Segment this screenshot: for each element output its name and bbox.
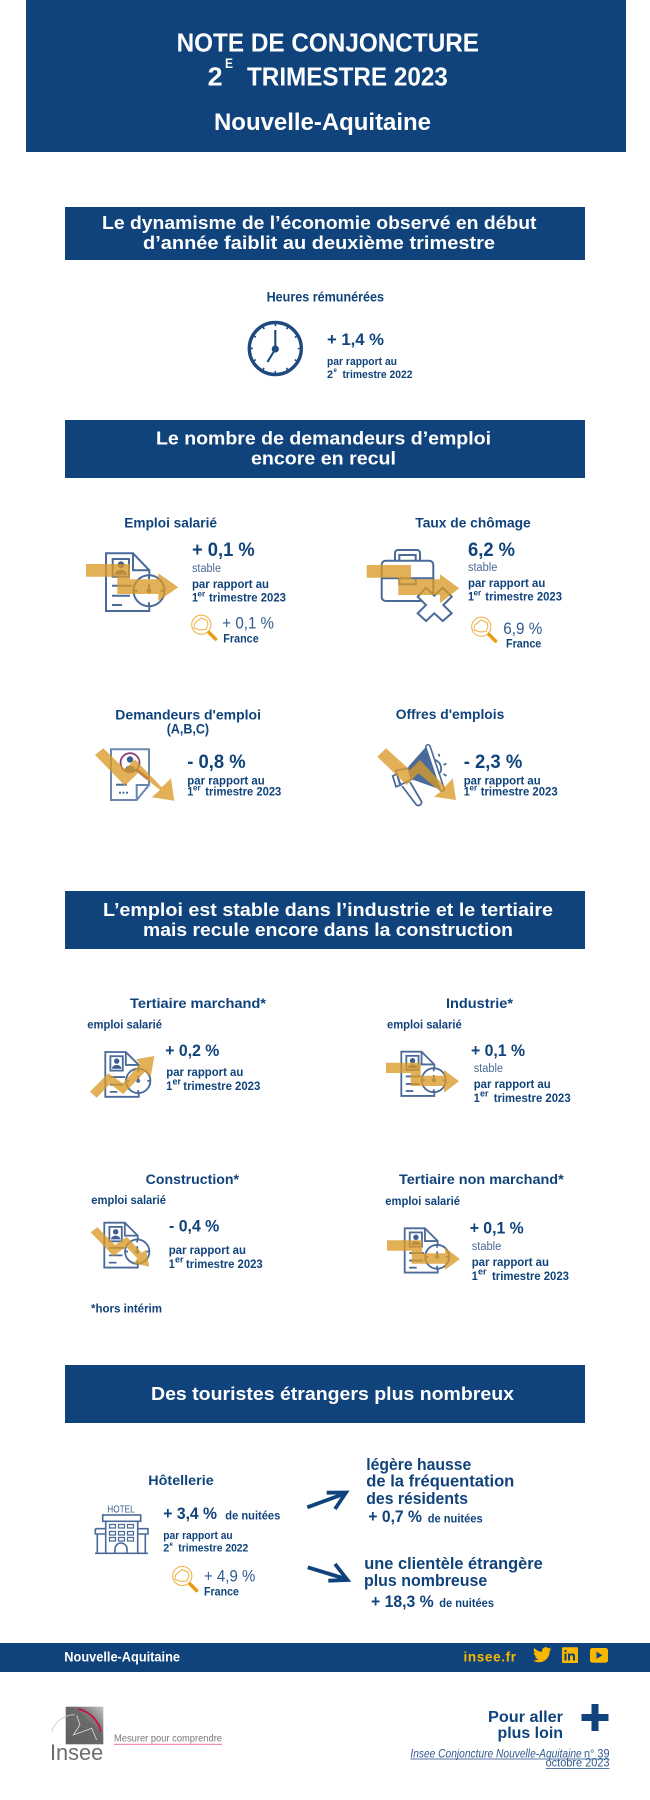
comparison text: 2 bbox=[163, 1543, 169, 1555]
heading: Construction* bbox=[146, 1171, 240, 1187]
callout: clientèle étrangère: de nuitées bbox=[439, 1598, 494, 1610]
heading: plus loin bbox=[498, 1725, 563, 1742]
heading: Tertiaire marchand* bbox=[130, 995, 267, 1011]
comparison text: er bbox=[480, 1088, 489, 1098]
section heading: touristes: Des touristes étrangers plus nombreux bbox=[151, 1383, 515, 1404]
comparison text bbox=[472, 1257, 569, 1283]
icon: document with magnifier bbox=[111, 749, 149, 800]
heading: Offres d'emplois bbox=[396, 706, 504, 722]
value: - 2,3 % bbox=[464, 751, 522, 773]
callout: résidents bbox=[366, 1456, 514, 1526]
panel: industrie bbox=[386, 995, 571, 1105]
value: - 0,8 % bbox=[187, 751, 246, 773]
publication link: n° 39 bbox=[584, 1746, 610, 1760]
icon: document and clock bbox=[105, 1052, 150, 1097]
icon: document and clock bbox=[401, 1052, 446, 1096]
value: + 0,2 % bbox=[165, 1041, 219, 1060]
icon: plus bbox=[582, 1704, 608, 1731]
comparison text: trimestre 2023 bbox=[485, 592, 562, 604]
comparison text: par rapport au bbox=[187, 775, 265, 787]
icon: magnifier France bbox=[192, 615, 216, 639]
footer region: Nouvelle-Aquitaine bbox=[64, 1650, 180, 1665]
icon: document and clock bbox=[405, 1228, 449, 1273]
heading: Pour aller bbox=[488, 1709, 563, 1726]
section heading: emploi par secteur: L’emploi est stable dans l’industrie et le tertiaire bbox=[103, 899, 553, 920]
arrow: stable bbox=[367, 565, 459, 603]
arrow: stable bbox=[386, 1063, 459, 1093]
comparison text: trimestre 2023 bbox=[481, 787, 558, 799]
panel: demandeurs d'emploi bbox=[95, 706, 281, 801]
section heading: dynamisme: d’année faiblit au deuxième trimestre bbox=[143, 232, 495, 253]
status: stable bbox=[474, 1063, 503, 1075]
value: + 1,4 % bbox=[327, 330, 384, 349]
publication link bbox=[410, 1746, 610, 1770]
footer bar bbox=[0, 1643, 650, 1672]
comparison text: par rapport au bbox=[163, 1530, 233, 1542]
France label: France bbox=[204, 1587, 239, 1599]
icon: linkedin bbox=[562, 1647, 578, 1663]
comparison text bbox=[474, 1079, 571, 1105]
title line 2 bbox=[208, 55, 448, 92]
panel: heures rémunérées bbox=[249, 289, 412, 381]
icon: megaphone bbox=[393, 746, 446, 806]
callout: résidents: de nuitées bbox=[428, 1513, 483, 1525]
title line 2: TRIMESTRE 2023 bbox=[247, 62, 448, 92]
icon: youtube bbox=[590, 1648, 608, 1663]
heading: Taux de chômage bbox=[415, 514, 531, 530]
comparison text: e bbox=[334, 368, 338, 374]
sublabel: emploi salarié bbox=[87, 1020, 162, 1032]
comparison text: er bbox=[193, 784, 201, 792]
publication link: octobre 2023 bbox=[546, 1756, 610, 1770]
tagline: Mesurer pour comprendre bbox=[114, 1732, 222, 1744]
icon: clock bbox=[249, 322, 301, 374]
value: + 3,4 % bbox=[163, 1504, 217, 1523]
region subtitle: Nouvelle-Aquitaine bbox=[214, 109, 431, 136]
comparison text: trimestre 2023 bbox=[494, 1093, 571, 1105]
callout: clientèle étrangère: une clientèle étrangère bbox=[364, 1555, 543, 1573]
icon: hotel: HOTEL bbox=[107, 1505, 135, 1516]
heading: Demandeurs d'emploi bbox=[115, 706, 261, 722]
callout: clientèle étrangère: + 18,3 % bbox=[371, 1592, 434, 1611]
panel: offres d'emplois bbox=[377, 706, 558, 806]
title line 2: 2 bbox=[208, 62, 223, 92]
comparison text: 2 bbox=[327, 369, 333, 381]
comparison text: 1 bbox=[472, 1271, 478, 1283]
comparison text: 1 bbox=[192, 593, 199, 605]
arrow: up bbox=[90, 1056, 154, 1098]
comparison text: er bbox=[478, 1266, 487, 1276]
panel: hôtellerie bbox=[95, 1472, 280, 1599]
header banner bbox=[26, 0, 626, 152]
comparison text bbox=[464, 775, 558, 799]
comparison text: 1 bbox=[468, 592, 475, 604]
panel: tertiaire marchand bbox=[87, 995, 267, 1098]
icon: hotel bbox=[95, 1505, 148, 1553]
icon: magnifier France bbox=[173, 1566, 196, 1590]
icon: twitter bbox=[533, 1647, 551, 1662]
comparison text: par rapport au bbox=[327, 356, 397, 368]
comparison text bbox=[166, 1067, 260, 1093]
France value: + 4,9 % bbox=[204, 1567, 255, 1586]
section heading: demandeurs d'emploi: Le nombre de demandeurs d’emploi bbox=[156, 428, 491, 448]
callout: clientèle étrangère: plus nombreuse bbox=[364, 1572, 487, 1590]
France value: + 0,1 % bbox=[222, 614, 274, 633]
Insee logo bbox=[50, 1707, 222, 1765]
arrow: stable bbox=[86, 564, 178, 601]
comparison text: 1 bbox=[166, 1081, 173, 1093]
callout: résidents: légère hausse bbox=[366, 1456, 471, 1474]
arrow: down bbox=[377, 748, 456, 800]
comparison text: trimestre 2022 bbox=[342, 369, 412, 381]
heading bbox=[488, 1709, 563, 1742]
comparison text: trimestre 2023 bbox=[492, 1271, 569, 1283]
heading: Tertiaire non marchand* bbox=[399, 1171, 564, 1187]
section heading: demandeurs d'emploi: encore en recul bbox=[251, 448, 396, 468]
comparison text bbox=[327, 356, 412, 381]
icon: briefcase with cross bbox=[382, 550, 452, 621]
value: - 0,4 % bbox=[169, 1216, 219, 1235]
section heading: dynamisme: Le dynamisme de l’économie observé en début bbox=[102, 212, 536, 233]
value: + 0,1 % bbox=[471, 1041, 525, 1060]
value bbox=[163, 1504, 280, 1523]
section heading: touristes bbox=[65, 1365, 585, 1423]
value: + 0,1 % bbox=[470, 1218, 524, 1237]
heading: Heures rémunérées bbox=[267, 289, 384, 305]
status: stable bbox=[468, 562, 497, 574]
section heading: emploi par secteur: mais recule encore dans la construction bbox=[143, 919, 513, 940]
comparison text: trimestre 2022 bbox=[178, 1543, 248, 1555]
arrow: down bbox=[95, 748, 174, 801]
icon: magnifier France bbox=[472, 617, 496, 641]
France label: France bbox=[506, 639, 541, 651]
section heading: demandeurs d'emploi bbox=[65, 420, 585, 478]
comparison text: par rapport au bbox=[472, 1257, 549, 1269]
value: 6,2 % bbox=[468, 539, 515, 561]
value: de nuitées bbox=[225, 1511, 280, 1523]
comparison text: 1 bbox=[464, 787, 470, 799]
comparison text: par rapport au bbox=[464, 775, 541, 787]
arrow: down to clientèle étrangère bbox=[308, 1564, 348, 1581]
comparison text: trimestre 2023 bbox=[183, 1081, 260, 1093]
comparison text: er bbox=[474, 588, 481, 598]
callout: résidents: de la fréquentation bbox=[366, 1473, 514, 1491]
panel: construction bbox=[91, 1171, 263, 1271]
callout: clientèle étrangère bbox=[364, 1555, 543, 1611]
comparison text: er bbox=[198, 590, 205, 598]
comparison text: er bbox=[470, 784, 477, 792]
comparison text: 1 bbox=[187, 787, 194, 799]
section heading: dynamisme bbox=[65, 207, 585, 260]
comparison text: er bbox=[172, 1076, 182, 1086]
link panel: pour aller plus loin bbox=[410, 1704, 610, 1770]
France value: 6,9 % bbox=[503, 619, 542, 638]
footnote: hors intérim: *hors intérim bbox=[91, 1304, 162, 1316]
panel: tertiaire non marchand bbox=[385, 1171, 569, 1283]
comparison text: trimestre 2023 bbox=[186, 1259, 263, 1271]
comparison text bbox=[468, 578, 562, 604]
France label: France bbox=[223, 634, 259, 646]
heading: (A,B,C) bbox=[167, 721, 209, 737]
comparison text: par rapport au bbox=[169, 1245, 246, 1257]
arrow: stable bbox=[387, 1240, 460, 1270]
sublabel: emploi salarié bbox=[385, 1196, 460, 1208]
website link: insee.fr bbox=[464, 1650, 517, 1665]
status: stable bbox=[192, 563, 221, 575]
callout: résidents: + 0,7 % bbox=[368, 1507, 422, 1526]
comparison text: par rapport au bbox=[166, 1067, 243, 1079]
section heading: emploi par secteur bbox=[65, 891, 585, 949]
comparison text: par rapport au bbox=[192, 579, 269, 591]
publication link: Insee Conjoncture Nouvelle-Aquitaine bbox=[410, 1746, 582, 1760]
comparison text: er bbox=[175, 1254, 184, 1264]
comparison text bbox=[169, 1245, 263, 1271]
comparison text bbox=[187, 775, 281, 799]
heading: Emploi salarié bbox=[124, 514, 217, 530]
icon: document and clock bbox=[106, 553, 164, 611]
icon: document and clock bbox=[104, 1223, 149, 1268]
comparison text bbox=[163, 1530, 248, 1555]
sublabel: emploi salarié bbox=[91, 1195, 166, 1207]
title line 2: E bbox=[225, 55, 233, 71]
panel: taux de chômage bbox=[367, 514, 562, 651]
comparison text: 1 bbox=[169, 1259, 175, 1271]
comparison text: trimestre 2023 bbox=[205, 787, 281, 799]
arrow: up to résidents bbox=[307, 1492, 346, 1509]
status: stable bbox=[472, 1241, 501, 1253]
panel: emploi salarié bbox=[86, 514, 286, 646]
title line 1: NOTE DE CONJONCTURE bbox=[177, 28, 479, 58]
comparison text: 1 bbox=[474, 1093, 480, 1105]
comparison text: trimestre 2023 bbox=[209, 593, 286, 605]
callout: résidents: des résidents bbox=[366, 1490, 468, 1508]
heading: Hôtellerie bbox=[148, 1472, 214, 1488]
value: + 0,1 % bbox=[192, 539, 255, 561]
comparison text: par rapport au bbox=[474, 1079, 551, 1091]
sublabel: emploi salarié bbox=[387, 1020, 462, 1032]
Insee logo: Insee bbox=[50, 1740, 103, 1765]
comparison text bbox=[192, 579, 286, 605]
heading: Industrie* bbox=[446, 995, 514, 1011]
comparison text: par rapport au bbox=[468, 578, 545, 590]
heading bbox=[115, 706, 261, 737]
arrow: down bbox=[91, 1227, 149, 1267]
comparison text: e bbox=[170, 1542, 174, 1548]
